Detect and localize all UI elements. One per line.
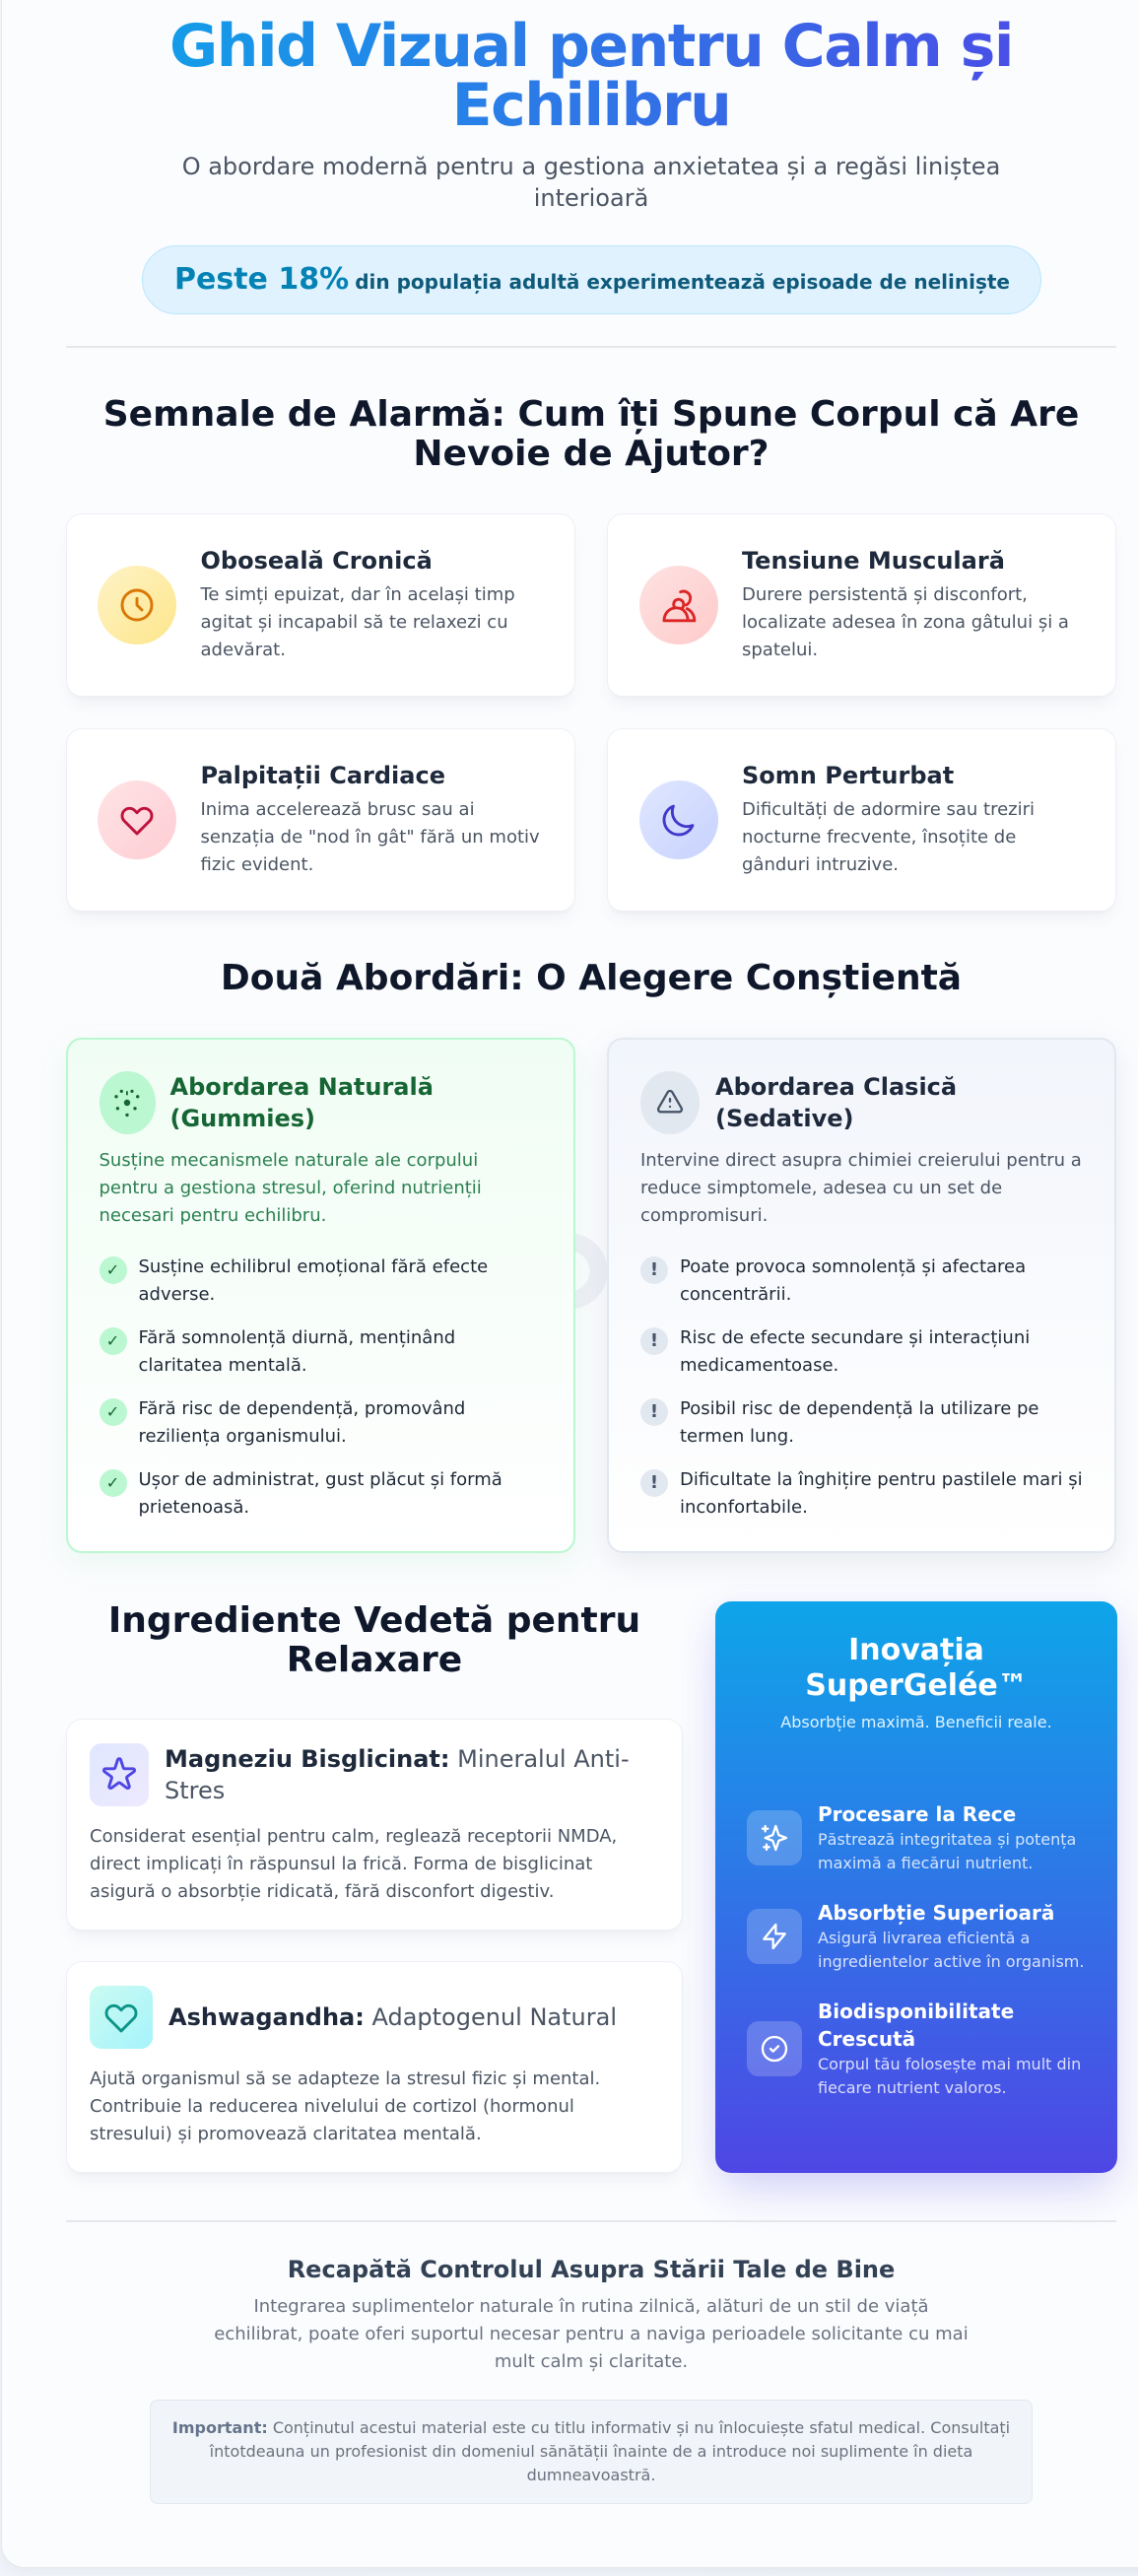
- drawback 3: [640, 1398, 1038, 1447]
- closing paragraph: [214, 2296, 969, 2372]
- drawback 1: !: [650, 1259, 658, 1280]
- panel title: (Sedative): [715, 1105, 853, 1132]
- card text: Oboseală Cronică: [201, 547, 433, 575]
- card text: gânduri intruzive.: [742, 854, 899, 875]
- benefit 3: ✓: [106, 1402, 119, 1421]
- card text: [742, 762, 1035, 875]
- panel description: [640, 1150, 1082, 1226]
- panel title: SuperGelée™: [805, 1668, 1028, 1703]
- drawback 2: medicamentoase.: [680, 1355, 838, 1376]
- feature text: maximă a fiecărui nutrient.: [818, 1854, 1033, 1872]
- card: disturbed sleep: [607, 728, 1116, 912]
- card text: Palpitații Cardiace: [201, 762, 445, 789]
- card text: agitat și incapabil să te relaxezi cu: [201, 612, 508, 633]
- drawback 3: termen lung.: [680, 1426, 794, 1447]
- card: chronic fatigue: [65, 513, 575, 697]
- panel description: Susține mecanismele naturale ale corpului: [99, 1150, 478, 1171]
- icon: natural dots: [99, 1071, 156, 1134]
- medical disclaimer: [150, 2400, 1033, 2504]
- benefit 2: [100, 1327, 455, 1376]
- feature: superior absorption: [747, 1901, 1084, 1971]
- icon: warning: [640, 1071, 700, 1134]
- benefit 3: [100, 1398, 465, 1447]
- feature text: Biodisponibilitate: [818, 2000, 1014, 2023]
- panel title: Inovația: [848, 1633, 984, 1667]
- card text: [201, 762, 540, 875]
- benefit 1: adverse.: [138, 1284, 215, 1305]
- benefit 4: prietenoasă.: [138, 1497, 249, 1518]
- drawback 1: concentrării.: [680, 1284, 791, 1305]
- ingredient description: [90, 2068, 600, 2144]
- benefit 4: ✓: [106, 1473, 119, 1492]
- statistic pill: [142, 245, 1041, 314]
- drawback 2: Risc de efecte secundare și interacțiuni: [680, 1327, 1030, 1348]
- drawback 4: Dificultate la înghițire pentru pastilele mari și: [680, 1469, 1083, 1490]
- panel title: Abordarea Naturală: [169, 1073, 434, 1101]
- feature text: Corpul tău folosește mai mult din: [818, 2055, 1081, 2073]
- heading: star ingredients: Ingrediente Vedetă pentru: [108, 1600, 640, 1641]
- medical disclaimer: dumneavoastră.: [527, 2466, 655, 2484]
- card text: [200, 547, 515, 660]
- card: palpitations: [65, 728, 575, 912]
- watermark ring between panels: [575, 1234, 607, 1309]
- card text: spatelui.: [742, 640, 818, 660]
- card text: [742, 547, 1069, 660]
- feature text: fiecare nutrient valoros.: [818, 2078, 1007, 2097]
- benefit 1: ✓: [106, 1260, 119, 1279]
- ingredient description: direct implicați în răspunsul la frică. Forma de bisglicinat: [90, 1854, 592, 1874]
- panel title: [169, 1073, 434, 1132]
- title: Echilibru: [452, 71, 730, 140]
- benefit 1: Susține echilibrul emoțional fără efecte: [138, 1256, 488, 1277]
- panel title: Abordarea Clasică: [715, 1073, 957, 1101]
- panel title: (Gummies): [169, 1105, 315, 1132]
- card text: Te simți epuizat, dar în același timp: [201, 584, 515, 605]
- feature text: Păstrează integritatea și potența: [818, 1830, 1076, 1849]
- panel: SuperGelée innovation: [715, 1601, 1117, 2173]
- ingredient title: Magneziu Bisglicinat: Mineralul Anti-: [165, 1745, 630, 1773]
- drawback 1: [640, 1256, 1026, 1305]
- feature: bioavailability: [747, 2000, 1081, 2097]
- card: muscle tension: [607, 513, 1116, 697]
- icon: clock: [98, 566, 176, 644]
- card text: Inima accelerează brusc sau ai: [201, 799, 475, 820]
- panel description: necesari pentru echilibru.: [99, 1205, 326, 1226]
- heading: warning signs: Nevoie de Ajutor?: [413, 434, 770, 474]
- benefit 2: Fără somnolență diurnă, menținând: [138, 1327, 455, 1348]
- ingredient title: [165, 1745, 630, 1804]
- feature text: Procesare la Rece: [818, 1802, 1016, 1826]
- ingredient title: Stres: [165, 1777, 225, 1804]
- card text: senzația de "nod în gât" fără un motiv: [201, 827, 540, 847]
- feature text: Crescută: [818, 2027, 915, 2051]
- closing heading: Recapătă Controlul Asupra Stării Tale de Bine: [288, 2256, 895, 2283]
- feature text: [818, 1901, 1084, 1971]
- icon: heart: [98, 780, 176, 859]
- heading: warning signs: Semnale de Alarmă: Cum îți Spune Corpul că Are: [103, 394, 1079, 435]
- panel description: compromisuri.: [640, 1205, 768, 1226]
- panel description: pentru a gestiona stresul, oferind nutrienții: [99, 1178, 482, 1198]
- ingredient description: Considerat esențial pentru calm, reglează receptorii NMDA,: [90, 1826, 617, 1847]
- drawback 2: [640, 1327, 1030, 1376]
- heading: warning signs: [103, 394, 1079, 474]
- card: magnesium: [66, 1719, 683, 1931]
- drawback 1: Poate provoca somnolență și afectarea: [680, 1256, 1026, 1277]
- icon: sparkles: [747, 1810, 802, 1865]
- closing paragraph: mult calm și claritate.: [495, 2351, 688, 2372]
- benefit 3: Fără risc de dependență, promovând: [138, 1398, 465, 1419]
- icon: muscle: [639, 566, 718, 644]
- icon: heart: [90, 1986, 153, 2049]
- feature text: Absorbție Superioară: [818, 1901, 1054, 1925]
- feature text: Asigură livrarea eficientă a: [818, 1929, 1030, 1947]
- medical disclaimer: întotdeauna un profesionist din domeniul sănătății înainte de a introduce noi suplimente în dieta: [210, 2442, 972, 2461]
- title: Ghid Vizual pentru Calm și: [169, 12, 1013, 81]
- ingredient description: stresului) și promovează claritatea mentală.: [90, 2124, 482, 2144]
- benefit 2: claritatea mentală.: [138, 1355, 307, 1376]
- ingredient description: Ajută organismul să se adapteze la stresul fizic și mental.: [90, 2068, 600, 2089]
- panel description: [99, 1150, 482, 1226]
- benefit 1: [100, 1256, 488, 1305]
- icon: lightning: [747, 1909, 802, 1964]
- subtitle: O abordare modernă pentru a gestiona anxietatea și a regăsi liniștea: [182, 153, 1000, 180]
- ingredient description: asigură o absorbție ridicată, fără disconfort digestiv.: [90, 1881, 554, 1902]
- drawback 4: [640, 1469, 1083, 1518]
- panel: natural approach: [65, 1038, 575, 1553]
- feature text: ingredientelor active în organism.: [818, 1952, 1084, 1971]
- benefit 2: ✓: [106, 1331, 119, 1350]
- panel description: Intervine direct asupra chimiei creierului pentru a: [640, 1150, 1082, 1171]
- card text: fizic evident.: [201, 854, 313, 875]
- icon: moon: [639, 780, 718, 859]
- benefit 4: [100, 1469, 502, 1518]
- panel title: [715, 1073, 957, 1132]
- card text: adevărat.: [201, 640, 286, 660]
- card: ashwagandha: [66, 1961, 683, 2173]
- panel: classic approach: [607, 1038, 1116, 1553]
- heading: star ingredients: [108, 1600, 640, 1680]
- icon: check circle: [747, 2021, 802, 2076]
- drawback 4: !: [650, 1472, 658, 1493]
- panel title: [805, 1633, 1028, 1703]
- card text: Dificultăți de adormire sau treziri: [742, 799, 1035, 820]
- panel description: reduce simptomele, adesea cu un set de: [640, 1178, 1002, 1198]
- feature text: [818, 2000, 1081, 2097]
- drawback 3: Posibil risc de dependență la utilizare pe: [680, 1398, 1038, 1419]
- feature text: [818, 1802, 1076, 1872]
- subtitle: interioară: [534, 184, 648, 212]
- card text: Tensiune Musculară: [742, 547, 1005, 575]
- card text: localizate adesea în zona gâtului și a: [742, 612, 1069, 633]
- benefit 4: Ușor de administrat, gust plăcut și formă: [138, 1469, 502, 1490]
- ingredient description: Contribuie la reducerea nivelului de cortizol (hormonul: [90, 2096, 574, 2117]
- benefit 3: reziliența organismului.: [138, 1426, 347, 1447]
- drawback 3: !: [650, 1401, 658, 1422]
- card text: Somn Perturbat: [742, 762, 954, 789]
- closing paragraph: echilibrat, poate oferi suportul necesar pentru a naviga perioadele solicitante cu mai: [214, 2324, 969, 2344]
- icon: star: [90, 1743, 149, 1806]
- drawback 2: !: [650, 1330, 658, 1351]
- title: [66, 17, 1116, 135]
- panel subtitle: Absorbție maximă. Beneficii reale.: [780, 1713, 1052, 1731]
- closing paragraph: Integrarea suplimentelor naturale în rutina zilnică, alături de un stil de viață: [253, 2296, 929, 2317]
- ingredient title: Ashwagandha: Adaptogenul Natural: [168, 2003, 617, 2031]
- card text: nocturne frecvente, însoțite de: [742, 827, 1016, 847]
- statistic pill: Peste 18% din populația adultă experimentează episoade de neliniște: [174, 262, 1010, 297]
- feature: cold processing: [747, 1802, 1076, 1872]
- heading: star ingredients: Relaxare: [287, 1640, 462, 1680]
- medical disclaimer: Important: Conținutul acestui material este cu titlu informativ și nu înlocuiește sfatul medical. Consultați: [172, 2418, 1010, 2437]
- heading: two approaches: Două Abordări: O Alegere Conștientă: [221, 958, 962, 998]
- drawback 4: inconfortabile.: [680, 1497, 808, 1518]
- ingredient description: [90, 1826, 617, 1902]
- subtitle: [182, 153, 1000, 212]
- card text: Durere persistentă și disconfort,: [742, 584, 1028, 605]
